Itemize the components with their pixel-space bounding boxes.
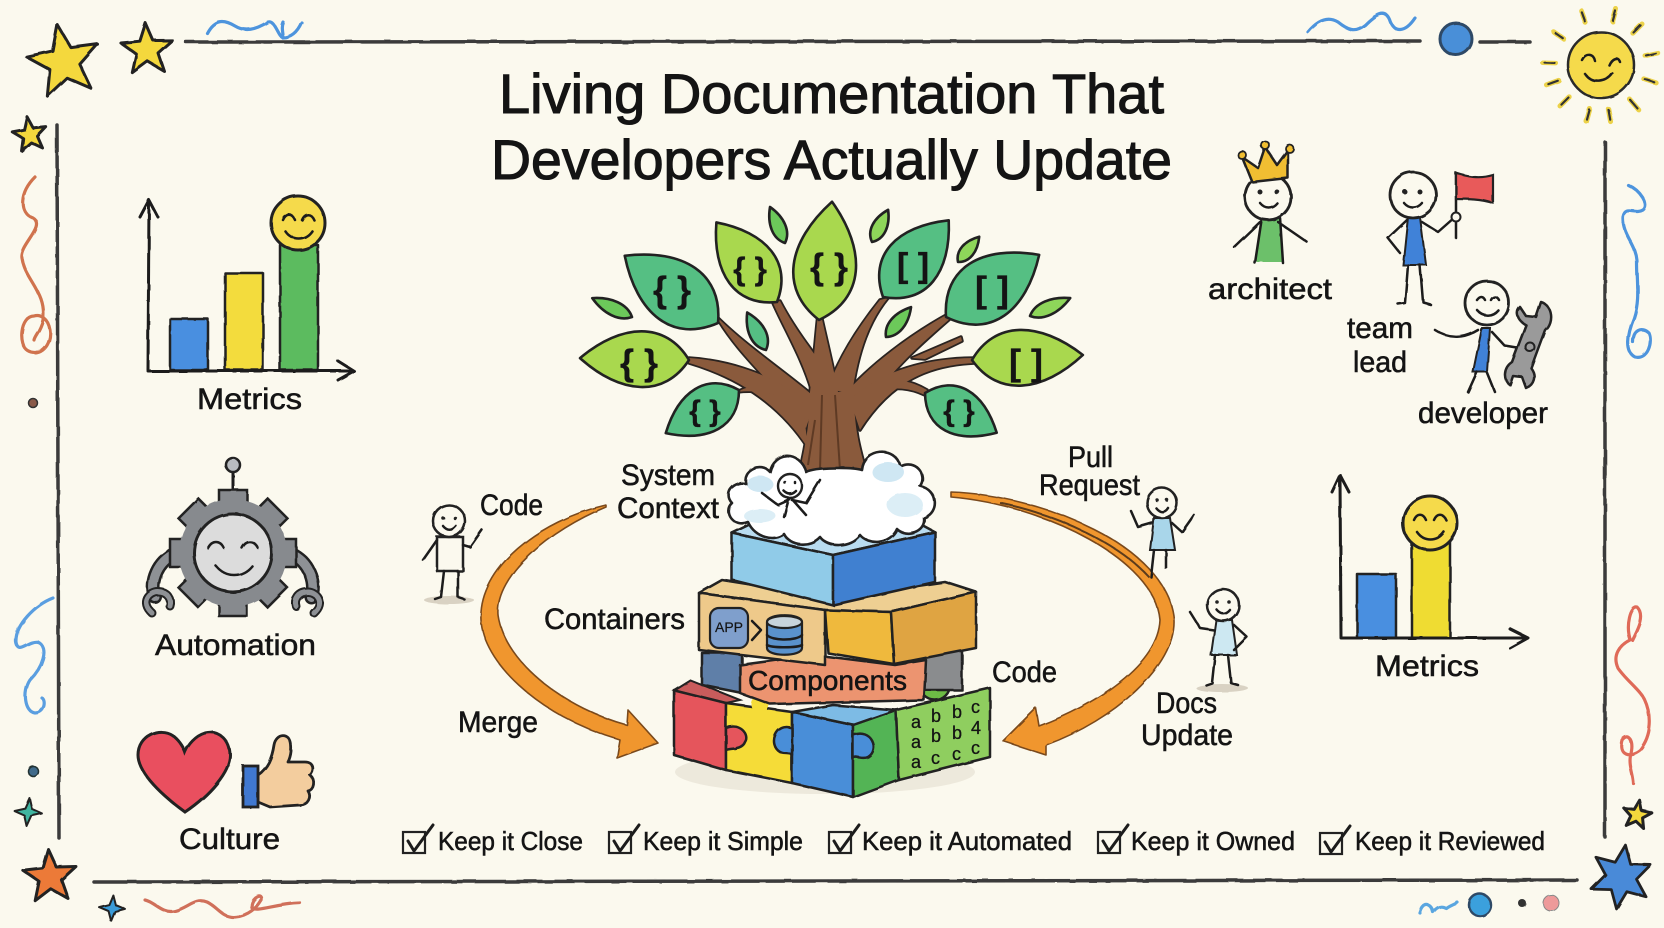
label: docs update	[1141, 687, 1233, 752]
label: merge: Merge	[458, 706, 538, 739]
title: Developers Actually Update	[491, 128, 1172, 191]
bar chart: three rising bars	[140, 196, 354, 380]
label: team lead: lead	[1353, 346, 1407, 379]
leaf brackets: [ ]	[975, 269, 1009, 310]
leaf brackets: [ ]	[1009, 342, 1043, 383]
letter grid on puzzle block: 4	[971, 718, 981, 738]
illustration: stack shadow	[675, 750, 975, 794]
letter grid on puzzle block: c	[971, 697, 980, 717]
leaf brackets: [ ]	[897, 247, 929, 285]
leaf: left big	[606, 230, 736, 348]
box front centre	[825, 610, 894, 664]
block: containers layer	[699, 580, 976, 665]
label: culture: Culture	[179, 823, 280, 856]
illustration: code tree	[580, 198, 1084, 478]
leaf brackets: { }	[943, 395, 975, 428]
icon: blue burst star	[1589, 841, 1653, 913]
icon: brown dot	[28, 398, 38, 408]
label: docs update: Update	[1141, 719, 1233, 752]
leaf: right big	[929, 229, 1056, 343]
squiggle: red bottom	[145, 896, 300, 917]
icon: large yellow star	[22, 18, 105, 99]
leaf: low left	[654, 370, 751, 453]
icon: orange star	[21, 847, 78, 901]
tree trunk and branches	[689, 298, 975, 478]
piece: green knob	[920, 670, 950, 700]
icon: heart	[138, 732, 230, 812]
icon: blue sparkle	[98, 894, 126, 922]
leaves	[580, 198, 1084, 453]
piece: yellow	[726, 703, 792, 783]
arrow: docs loop right	[951, 492, 1174, 755]
item: keep it reviewed: Keep it Reviewed	[1355, 826, 1545, 856]
box front left	[699, 593, 825, 665]
label: components: Components	[748, 665, 907, 696]
leaf: upper right	[862, 202, 970, 315]
squiggle: blue top right	[1308, 14, 1415, 32]
item: keep it close: Keep it Close	[438, 826, 583, 856]
letter grid on puzzle block: a	[911, 732, 922, 752]
panel: automation	[146, 458, 320, 662]
label: automation: Automation	[155, 629, 316, 662]
figure: team lead with flag	[1388, 172, 1493, 304]
figure: person in cloud	[762, 474, 820, 517]
leaf: middle left	[580, 330, 689, 388]
piece: blue top	[792, 705, 896, 725]
label: metrics: Metrics	[1375, 650, 1479, 683]
squiggle and dots: bottom right	[1420, 894, 1559, 916]
icon: smiling gear robot	[146, 458, 320, 616]
label: architect: architect	[1208, 273, 1333, 306]
figure: code author	[423, 505, 482, 604]
letter grid on puzzle block: b	[931, 726, 941, 746]
letter grid on puzzle block: a	[911, 712, 922, 732]
icon: yellow star	[120, 22, 174, 73]
item: keep it automated: Keep it Automated	[862, 826, 1072, 856]
bar chart: two bars	[1332, 475, 1528, 648]
piece: letter block	[896, 688, 990, 780]
icon: cloud	[728, 452, 935, 545]
letter grid on puzzle block: c	[952, 744, 961, 764]
box top	[699, 580, 976, 612]
label: system context	[617, 459, 720, 525]
leaf: center	[788, 198, 863, 323]
label: team lead	[1347, 312, 1413, 379]
squiggle: blue left	[16, 598, 53, 713]
icon: app and database	[710, 608, 802, 655]
checklist	[403, 825, 1545, 856]
label: code left: Code	[480, 489, 543, 522]
leaf brackets: { }	[653, 269, 691, 310]
label: metrics: Metrics	[197, 383, 302, 416]
piece: yellow knob	[751, 695, 769, 713]
illustration: puzzle foundation	[674, 670, 990, 797]
item: keep it owned: Keep it Owned	[1131, 826, 1295, 856]
small leaves	[589, 204, 1073, 354]
label: system context: Context	[617, 492, 720, 525]
label: containers: Containers	[544, 603, 685, 636]
squiggle: orange left	[22, 177, 50, 353]
figure: pull request reviewer	[1131, 488, 1194, 577]
squiggle: blue top left	[207, 22, 302, 38]
leaf brackets: { }	[689, 395, 721, 428]
block: components layer	[702, 650, 962, 704]
piece: blue tab right	[853, 734, 874, 758]
icon: smiling sun	[1543, 9, 1658, 122]
panel: roles	[1208, 141, 1551, 430]
label: docs update: Docs	[1156, 687, 1217, 720]
icon: small yellow star	[11, 115, 49, 152]
squiggle: red right	[1616, 607, 1650, 783]
piece: green	[853, 710, 899, 797]
leaf brackets: { }	[620, 342, 658, 383]
panel: culture	[138, 732, 314, 856]
title: Living Documentation That	[499, 62, 1164, 125]
icon: teal sparkle	[13, 797, 43, 827]
label: developer: developer	[1418, 397, 1548, 430]
block: system context box	[732, 505, 935, 605]
icon: app and database: APP	[715, 619, 743, 635]
piece: red	[674, 690, 726, 770]
icon: blue dot on top line	[1440, 23, 1472, 55]
label: code right: Code	[992, 656, 1057, 689]
leaf brackets: { }	[810, 246, 848, 287]
title	[491, 62, 1172, 191]
leaf: low right	[914, 373, 1008, 453]
piece: red tab	[726, 726, 746, 750]
panel: metrics chart left	[140, 196, 354, 416]
item: keep it simple: Keep it Simple	[643, 826, 803, 856]
box right	[891, 592, 976, 664]
letter grid on puzzle block: b	[952, 723, 962, 743]
letter grid on puzzle block: b	[952, 702, 962, 722]
letter grid on puzzle block	[911, 697, 981, 772]
piece: blue	[792, 712, 853, 797]
letter grid on puzzle block: a	[911, 752, 922, 772]
label: pull request: Request	[1039, 469, 1141, 502]
piece: blue tab left	[774, 727, 792, 755]
letter grid on puzzle block: b	[931, 706, 941, 726]
icon: navy dot	[28, 766, 38, 776]
leaf brackets	[620, 246, 1043, 428]
icon: small yellow star right	[1621, 798, 1654, 829]
icon: thumbs up	[243, 736, 314, 807]
figure: docs updater	[1190, 589, 1248, 692]
figure: architect with crown	[1234, 141, 1307, 263]
label: pull request	[1039, 441, 1141, 502]
figure: developer with wrench	[1435, 281, 1551, 392]
label: team lead: team	[1347, 312, 1413, 345]
leaf brackets: { }	[733, 251, 767, 287]
panel: metrics chart right	[1332, 475, 1528, 683]
block: puzzle top	[674, 680, 740, 703]
leaf: middle right	[971, 327, 1084, 388]
squiggle: blue right	[1623, 185, 1650, 357]
letter grid on puzzle block: c	[971, 738, 980, 758]
arrow: merge loop left	[481, 505, 658, 758]
letter grid on puzzle block: c	[931, 748, 940, 768]
leaf: upper left	[695, 206, 798, 318]
label: pull request: Pull	[1068, 441, 1113, 474]
label: system context: System	[621, 459, 715, 492]
